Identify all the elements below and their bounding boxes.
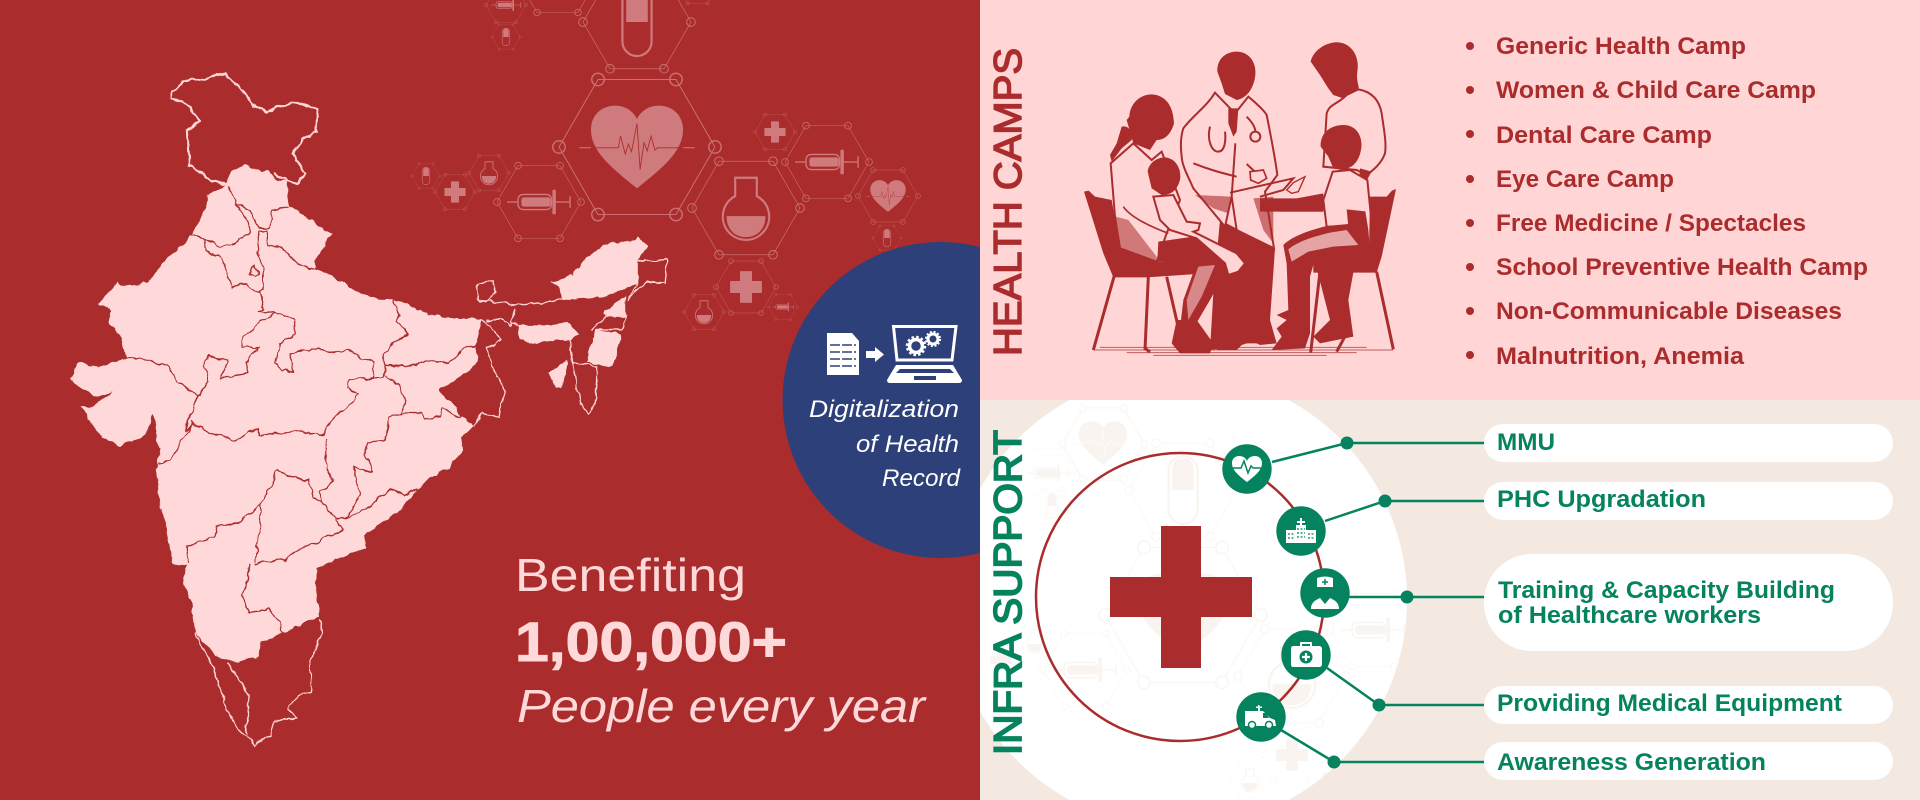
medical hexagon network graphic xyxy=(411,0,920,331)
standing mother xyxy=(1311,42,1386,192)
faint hexagon watermark xyxy=(982,404,1406,799)
pill: MMU: MMU xyxy=(1497,429,1555,456)
list item: women and child care camp: Women & Child Care Camp xyxy=(1496,77,1816,104)
pill: training and capacity building: Training & Capacity Building xyxy=(1498,577,1835,604)
panel: health camps background xyxy=(980,0,1920,400)
text: digitalization of health record: of Health xyxy=(856,431,959,458)
red cross xyxy=(1110,526,1252,668)
icon: laptop with gears xyxy=(887,326,962,383)
pill: MMU xyxy=(1484,424,1893,462)
map: outlined states xyxy=(173,74,667,745)
pill: PHC upgradation: PHC Upgradation xyxy=(1497,486,1706,513)
doctor xyxy=(1181,52,1293,350)
india map xyxy=(70,74,667,745)
health camps list xyxy=(1466,33,1868,370)
right chair xyxy=(1311,189,1396,353)
heading: health camps: HEALTH CAMPS xyxy=(987,48,1030,356)
illustration: doctor with family xyxy=(1084,42,1396,355)
connector lines xyxy=(1272,443,1484,762)
pill: awareness generation: Awareness Generation xyxy=(1497,749,1766,776)
panel: left background xyxy=(0,0,980,800)
pill: training and capacity building: of Healthcare workers xyxy=(1498,602,1761,629)
text: 1,00,000+: 1,00,000+ xyxy=(515,610,787,673)
icon: document xyxy=(827,333,859,375)
icon: hospital xyxy=(1276,506,1326,556)
list item: non-communicable diseases: Non-Communicable Diseases xyxy=(1496,298,1842,325)
map: filled mainland states xyxy=(70,165,482,663)
heading: infra support: INFRA SUPPORT xyxy=(987,430,1030,755)
boy xyxy=(1272,125,1371,350)
text: people every year: People every year xyxy=(517,680,927,732)
text: digitalization of health record: Digitalization xyxy=(809,396,959,423)
pill: providing medical equipment xyxy=(1484,686,1893,724)
map: state borders xyxy=(126,185,478,633)
list item: dental care camp: Dental Care Camp xyxy=(1496,122,1712,149)
bullets xyxy=(1466,42,1474,359)
map: filled north-east states xyxy=(518,236,648,390)
icon: arrow xyxy=(866,347,884,362)
icon: heart monitor xyxy=(1222,444,1272,494)
list item: free medicine / spectacles: Free Medicine / Spectacles xyxy=(1496,210,1806,237)
pill: PHC upgradation xyxy=(1484,482,1893,520)
text: digitalization of health record: Record xyxy=(882,465,961,492)
icon: ambulance xyxy=(1236,692,1286,742)
list item: eye care camp: Eye Care Camp xyxy=(1496,166,1674,193)
list item: malnutrition, anemia: Malnutrition, Anemia xyxy=(1496,343,1745,370)
seated mother with child xyxy=(1110,94,1245,353)
floor hatch xyxy=(1093,347,1393,355)
icon: medical kit xyxy=(1281,630,1331,680)
benefit statement text xyxy=(515,549,927,732)
icon: nurse xyxy=(1300,568,1350,618)
white circle backdrop xyxy=(980,400,1407,800)
left chair xyxy=(1084,191,1197,352)
table xyxy=(1260,193,1323,212)
blue callout circle: digitalization xyxy=(783,242,980,558)
pill: providing medical equipment: Providing Medical Equipment xyxy=(1497,690,1842,717)
text: digitalization of health record xyxy=(809,396,961,492)
pill: awareness generation xyxy=(1484,742,1893,780)
connector dots xyxy=(1328,436,1414,768)
list item: generic health camp: Generic Health Camp xyxy=(1496,33,1746,60)
panel: infra support background xyxy=(980,400,1920,800)
pill: training and capacity building xyxy=(1484,554,1893,651)
list item: school preventive health camp: School Preventive Health Camp xyxy=(1496,254,1868,281)
text: benefiting: Benefiting xyxy=(515,549,746,601)
red ring xyxy=(1036,453,1324,741)
